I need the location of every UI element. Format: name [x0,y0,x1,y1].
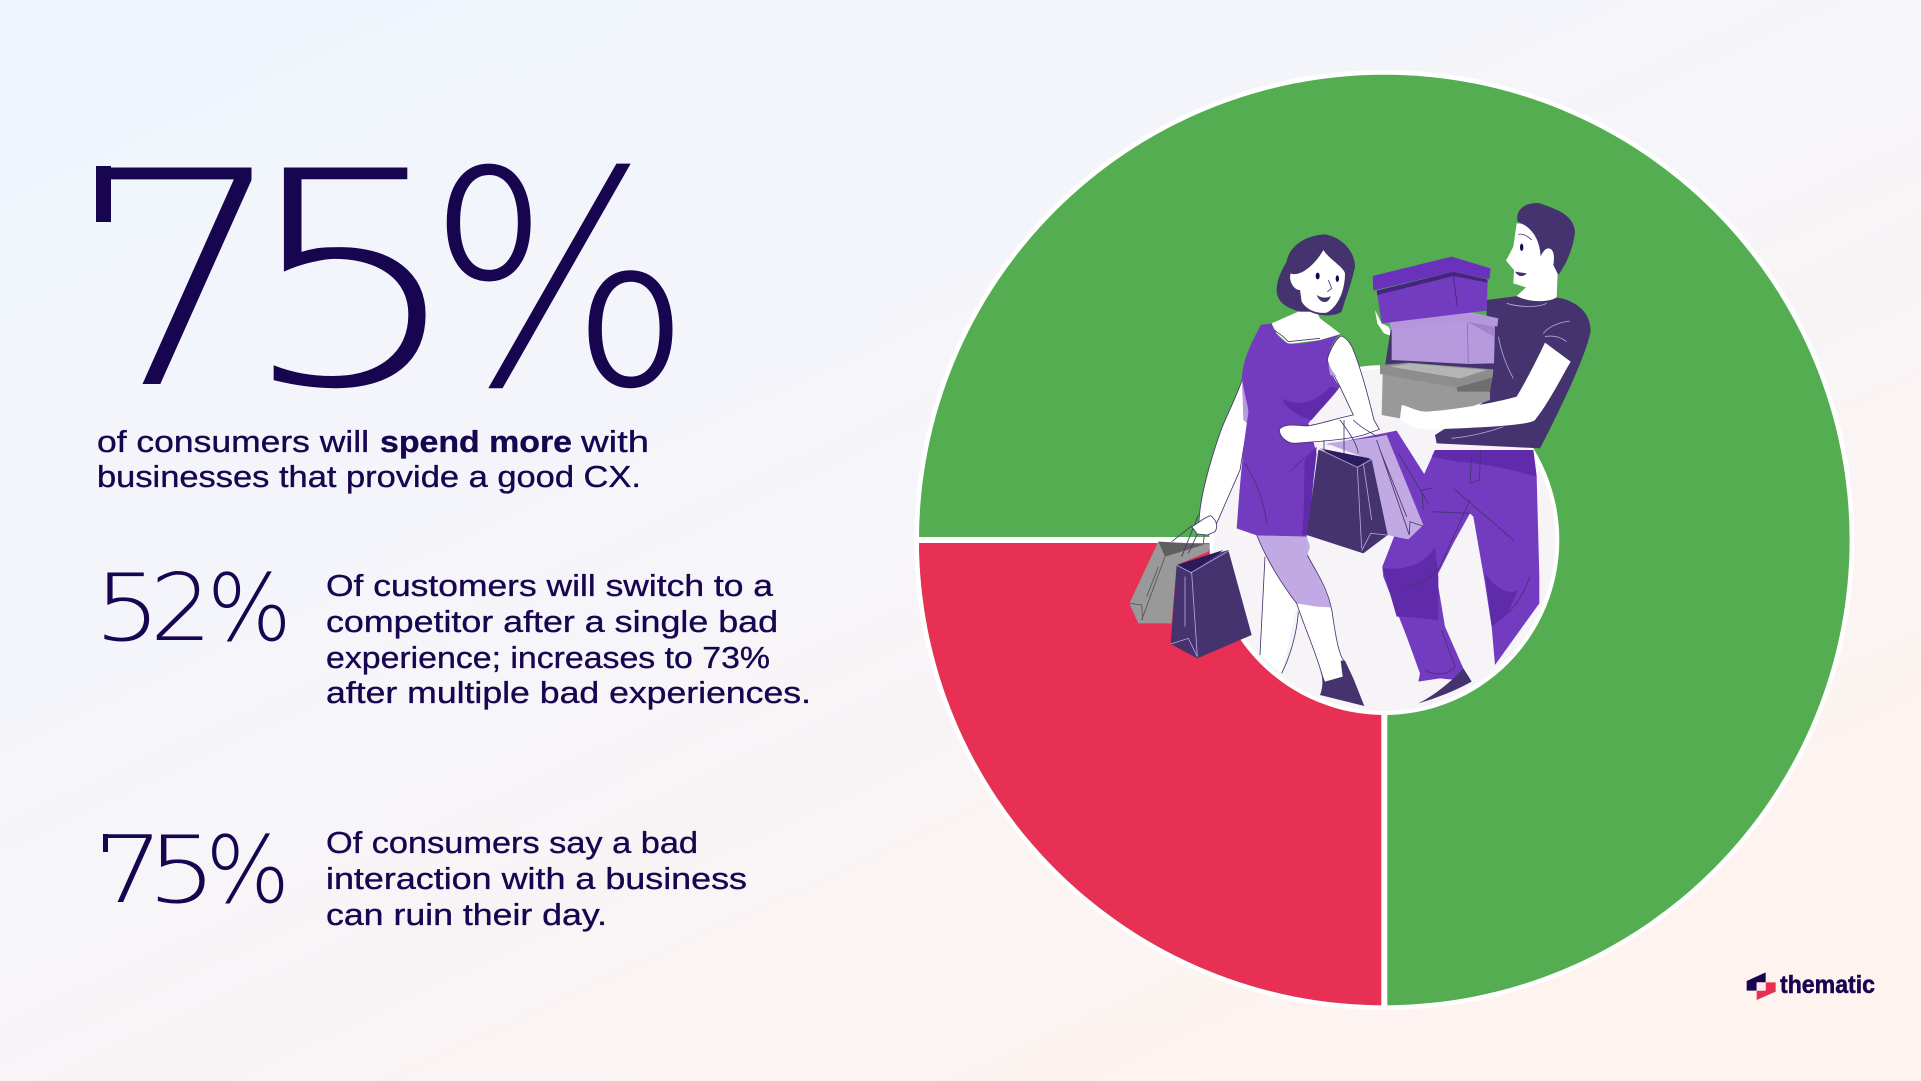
shopping bags [1129,420,1433,658]
statistic: 75% [95,816,290,925]
man's left hand [1375,310,1393,337]
green segment [919,75,1850,1005]
illustration: couple carrying shopping bags and boxes [1129,203,1591,706]
donut chart: 75% green, 25% red [914,70,1854,1010]
text: switch to a competitor: competitor after a single bad [326,605,778,639]
headline statistic: 75%: % [426,109,694,455]
headline description: with [580,425,649,459]
statistic: 52%: 5 [94,555,161,662]
statistic: 75%: 5 [147,816,217,924]
text: switch to a competitor [326,569,811,710]
headline statistic: 75% [70,108,694,455]
statistic: 75%: % [206,817,290,925]
logo wordmark: thematic [1780,971,1875,999]
logo: thematic [1747,971,1875,1000]
lower figures: legs and trousers [1257,450,1539,706]
purple box [1377,273,1488,323]
woman's shoe [1319,661,1364,706]
woman's right arm [1279,336,1379,443]
man's shirt [1435,296,1591,448]
text: a bad interaction can ruin the day: interaction with a business [326,862,747,896]
light purple box [1392,318,1495,364]
headline statistic: 75%: 7 [70,108,290,454]
statistic: 75%: 7 [95,816,164,924]
woman's neck and head [1272,234,1355,344]
statistic: 52%: % [207,554,292,662]
man's shoe [1418,668,1472,703]
shirt fold lines [1452,303,1570,438]
headline description: businesses that provide a good CX. [97,460,641,494]
woman's legs [1257,535,1364,706]
left-hand bags [1129,515,1252,658]
text: a bad interaction can ruin the day: can ruin their day. [326,898,607,932]
woman's purple dress [1237,323,1341,537]
red segment [919,540,1384,1005]
statistic: 52%: 2 [150,554,212,662]
headline description: spend more [380,425,572,459]
text: a bad interaction can ruin the day [326,826,747,932]
headline description [97,425,649,494]
headline statistic: 75%: 5 [238,110,465,455]
man's head and hair [1506,203,1575,301]
man's trousers [1382,450,1539,703]
text: switch to a competitor: experience; increases to 73% [326,641,770,675]
headline description: of consumers will [97,425,369,459]
logo mark [1747,972,1776,1000]
box stack backing [1383,323,1495,378]
man's right arm [1400,343,1571,430]
stacked shoe boxes [1373,257,1498,418]
text: a bad interaction can ruin the day: Of consumers say a bad [326,826,698,860]
text: switch to a competitor: after multiple bad experiences. [326,676,811,710]
statistic: 52% [94,554,292,662]
woman's left hand [1192,516,1217,535]
upper figures [1198,203,1591,537]
text: switch to a competitor: Of customers will switch to a [326,569,773,603]
woman's left arm [1198,377,1249,527]
centre bags [1307,420,1433,553]
arm shadow [1328,363,1337,377]
grey box [1382,373,1490,418]
